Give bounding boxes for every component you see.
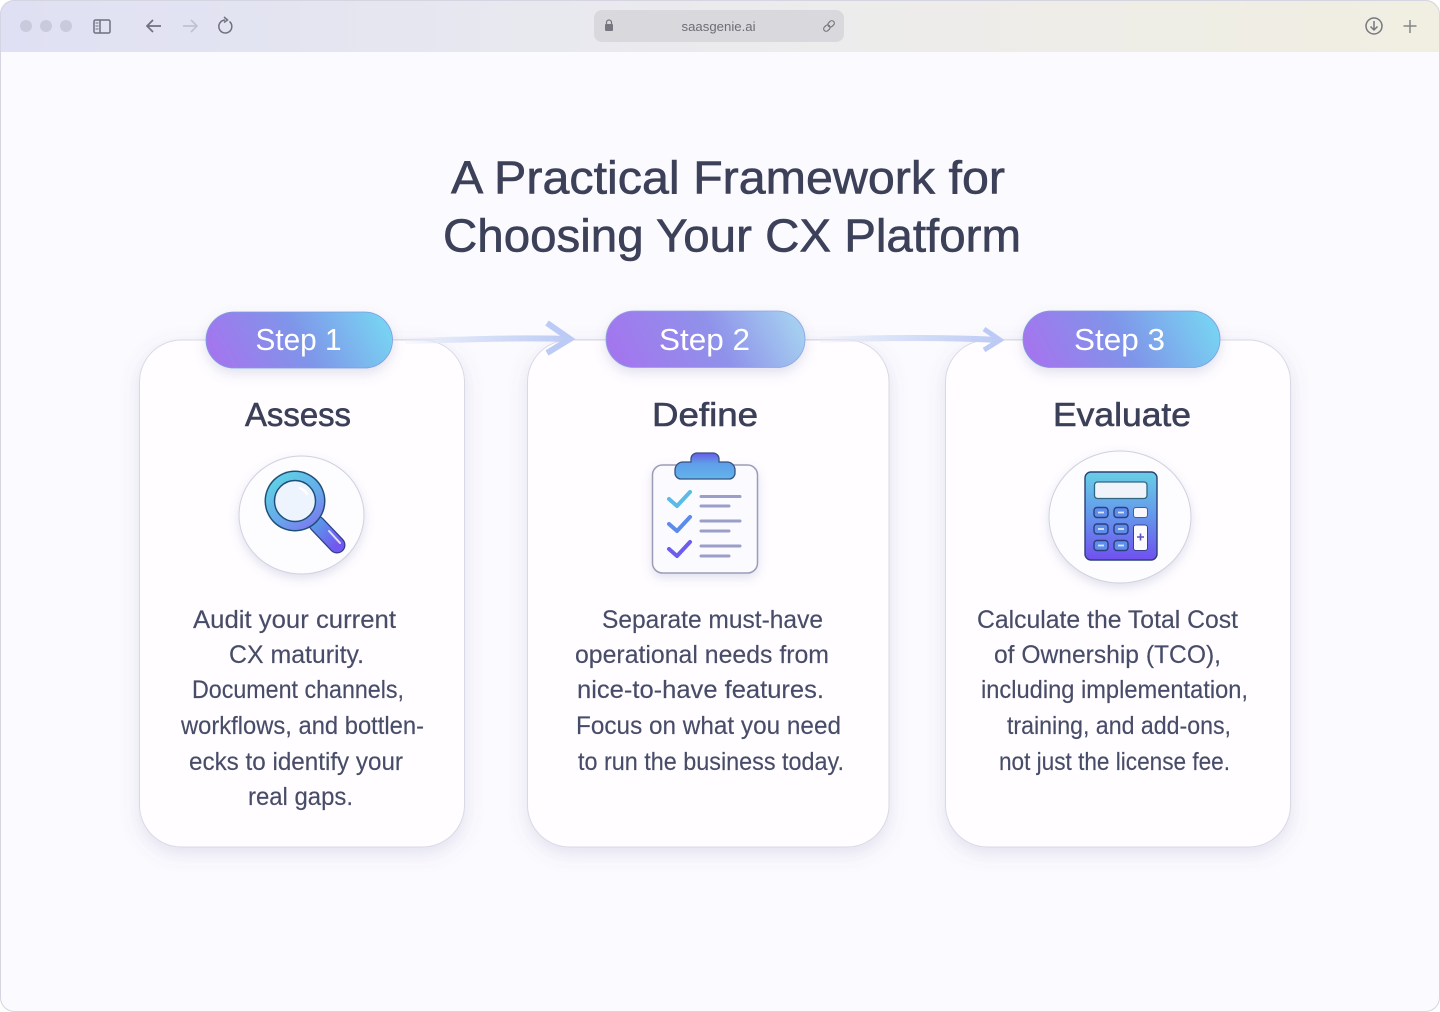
icon: magnifying glass [239, 456, 364, 574]
panel: step 1 assess [140, 340, 464, 847]
title [443, 152, 1021, 262]
icon: back arrow [147, 20, 161, 32]
step 1 pill [206, 312, 392, 368]
step 1 pill: Step 1 [256, 322, 342, 357]
icon: lock [605, 20, 613, 31]
icon: calculator [1049, 451, 1191, 583]
step 2 pill: Step 2 [659, 322, 750, 357]
body text [180, 606, 424, 811]
heading: Assess [245, 396, 351, 433]
body text [977, 606, 1248, 776]
body text: CX maturity. [229, 641, 364, 669]
card background [140, 340, 464, 847]
title: Choosing Your CX Platform [443, 210, 1021, 262]
body text: including implementation, [981, 676, 1248, 704]
body text: Audit your current [193, 606, 396, 634]
panel: step 2 define [528, 340, 889, 847]
panel: step 3 evaluate [946, 340, 1290, 847]
browser toolbar [0, 0, 1440, 52]
step 2 pill [606, 311, 805, 368]
title: A Practical Framework for [451, 152, 1005, 204]
body text [575, 606, 844, 776]
step 3 pill [1023, 311, 1220, 368]
body text: Focus on what you need [576, 712, 841, 740]
step 3 pill: Step 3 [1074, 322, 1165, 357]
body text: Separate must-have [602, 606, 823, 634]
icon: clipboard checklist [652, 453, 758, 573]
body text: Calculate the Total Cost [977, 606, 1238, 634]
arrow: step 2 to step 3 [820, 329, 1000, 350]
address bar [594, 10, 844, 42]
icon: reload [219, 17, 232, 33]
url: saasgenie.ai [682, 19, 756, 34]
icon: sidebar toggle [94, 20, 110, 33]
card background [946, 340, 1290, 847]
body text: workflows, and bottlen- [180, 712, 424, 740]
heading: Define [652, 396, 758, 433]
body text: of Ownership (TCO), [994, 641, 1221, 669]
body text: real gaps. [248, 783, 353, 811]
card background [528, 340, 889, 847]
arrow: step 1 to step 2 [405, 323, 570, 353]
icon: download [1366, 18, 1382, 34]
body text: operational needs from [575, 641, 829, 669]
body text: training, and add-ons, [1007, 712, 1231, 740]
body text: not just the license fee. [999, 748, 1230, 776]
body text: ecks to identify your [189, 748, 403, 776]
heading: Evaluate [1053, 396, 1191, 433]
icon: new tab plus [1404, 20, 1416, 33]
window control dots [20, 20, 72, 32]
icon: link [823, 20, 835, 32]
body text: to run the business today. [578, 748, 844, 776]
body text: Document channels, [192, 676, 404, 704]
body text: nice-to-have features. [577, 676, 824, 704]
icon: forward arrow [183, 20, 197, 32]
